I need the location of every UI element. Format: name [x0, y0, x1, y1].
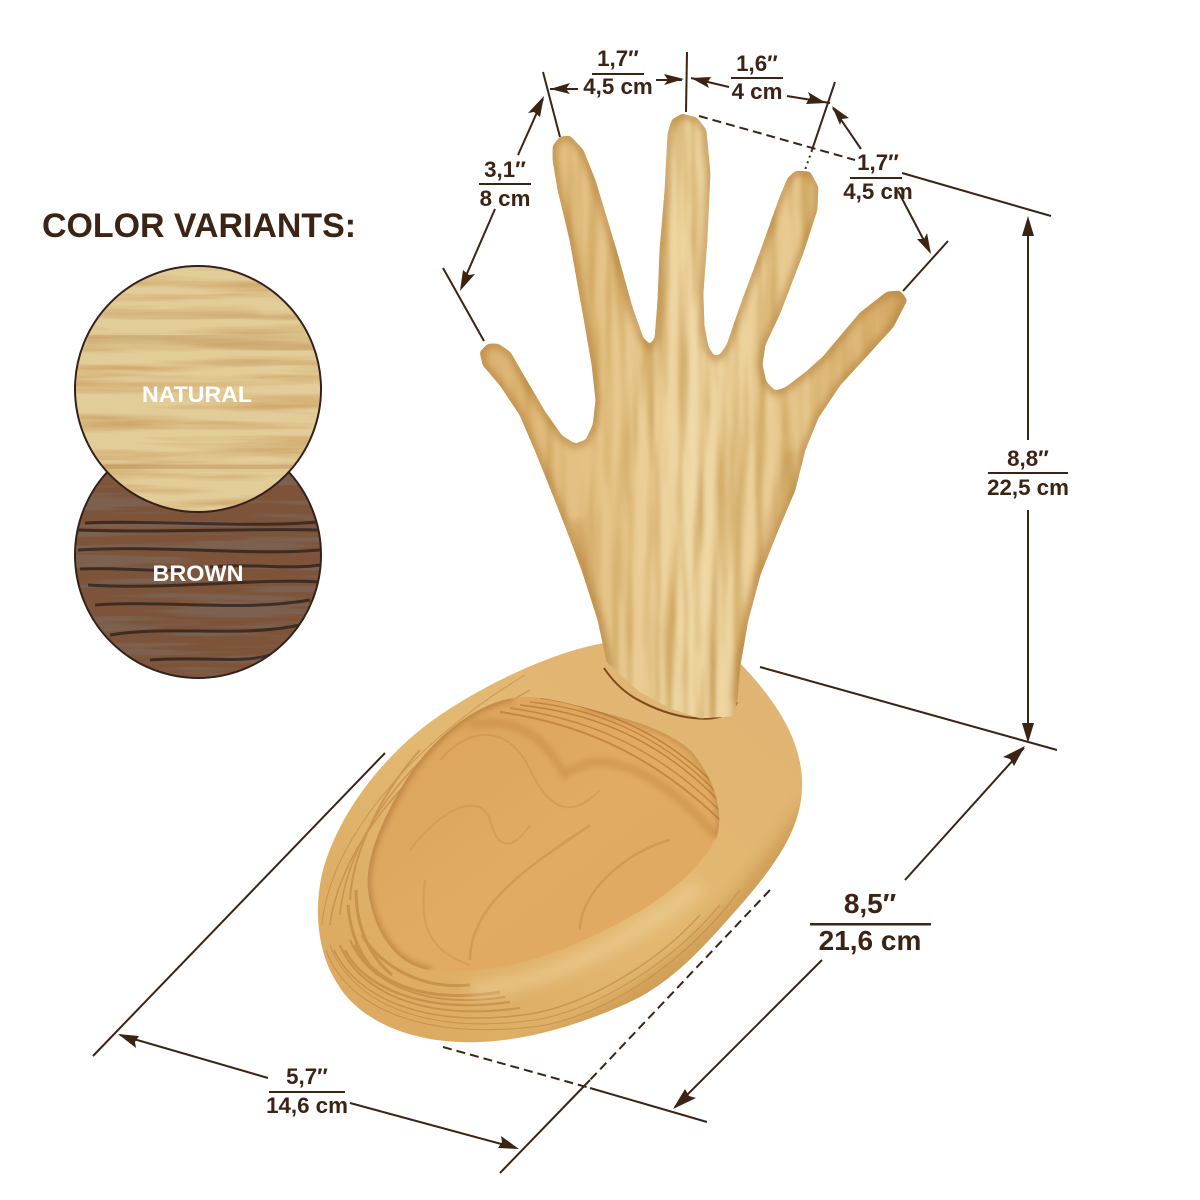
dimension: width 5,7 in: 14,6 cm [266, 1093, 348, 1118]
label: brown: BROWN [152, 561, 244, 586]
dimension: height 8,8 in [760, 216, 1069, 750]
hand socket line [604, 668, 737, 719]
dimension: finger span right 1,7 in: 4,5 cm [843, 179, 913, 204]
dimension: thumb span 3,1 in [443, 96, 544, 341]
dimension: length 8,5 in [93, 746, 1025, 1173]
bowl bottom shadow [540, 806, 800, 1034]
dimension: finger span right 1,7 in: 1,7″ [857, 150, 899, 175]
dimension: finger span middle 1,6 in: 4 cm [732, 79, 782, 104]
swatch: natural wood [75, 266, 321, 512]
dimension: width 5,7 in [118, 1034, 707, 1149]
dimension: finger span left 1,7 in [543, 46, 687, 137]
bowl base [318, 644, 802, 1042]
dimension: finger span left 1,7 in: 4,5 cm [583, 74, 653, 99]
hand edge shading [480, 114, 907, 725]
wooden hand [470, 105, 915, 730]
swatch: brown wood [74, 472, 322, 679]
dimension: finger span middle 1,6 in [691, 51, 855, 170]
dimension: width 5,7 in: 5,7″ [286, 1064, 328, 1089]
dimension: height 8,8 in: 8,8″ [1007, 446, 1049, 471]
dimension: finger span left 1,7 in: 1,7″ [597, 46, 639, 71]
dimension: length 8,5 in: 21,6 cm [819, 925, 921, 956]
bowl rim grain [322, 675, 740, 1030]
dimension: length 8,5 in: 8,5″ [844, 888, 896, 919]
dimension: thumb span 3,1 in: 8 cm [480, 186, 530, 211]
bowl well [368, 697, 720, 970]
dimension: thumb span 3,1 in: 3,1″ [484, 157, 526, 182]
label: natural: NATURAL [142, 382, 252, 407]
heading: color variants: COLOR VARIANTS: [42, 207, 356, 245]
bowl rim highlight [470, 885, 700, 990]
dimension: finger span middle 1,6 in: 1,6″ [736, 51, 778, 76]
dimension: height 8,8 in: 22,5 cm [987, 475, 1069, 500]
well inner shadow [368, 698, 513, 970]
dimension: finger span right 1,7 in [832, 106, 1051, 291]
